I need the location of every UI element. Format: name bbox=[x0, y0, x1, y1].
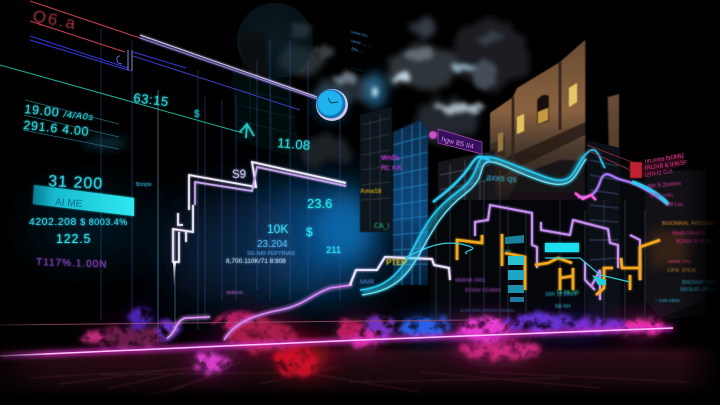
teal right text: ~ 2vM KBMI bbox=[655, 298, 680, 303]
pink sign: hgw 8S II4 bbox=[441, 136, 474, 151]
chart needle bbox=[173, 262, 176, 292]
skyscraper blue wireframe bbox=[393, 120, 428, 285]
teal right text: SBR 12 KKKX bbox=[545, 292, 578, 298]
small caption: Bonpio bbox=[136, 182, 152, 188]
teal right text: 4L NN bbox=[500, 248, 511, 253]
pink right text: IMoRt FRHFFL bbox=[672, 231, 706, 237]
up arrow bbox=[240, 124, 254, 138]
figure 11.08: 11.08 bbox=[277, 135, 311, 153]
left data text bbox=[23, 90, 311, 270]
blue background glow bbox=[30, 137, 385, 305]
pink right text bbox=[648, 181, 715, 274]
table rule lines bbox=[23, 100, 119, 149]
red trend lines bbox=[30, 1, 143, 52]
sky tiny text: www.mv.. bbox=[351, 29, 370, 39]
teal right text: T& RK NS bbox=[556, 290, 580, 296]
teal right text: SOM NRN RRRBN MMMN bbox=[460, 308, 514, 313]
left stepped chart line bbox=[173, 162, 346, 262]
magenta tower label two: RL KK bbox=[381, 165, 402, 172]
figure row: 8,700.110K/71 8:908 bbox=[226, 258, 286, 265]
smoke clouds bbox=[80, 308, 667, 376]
building bbox=[490, 40, 619, 225]
skyscraper dark bbox=[360, 107, 392, 232]
figure row one: 19.00 /4/A0s bbox=[24, 102, 95, 123]
cyan highlighted bar bbox=[33, 185, 134, 216]
magenta tower label: Wnlls bbox=[381, 155, 400, 162]
yellow chart label: PTEP bbox=[386, 258, 408, 267]
orange tower label: Ama18 bbox=[360, 188, 382, 195]
right stepped chart lines bbox=[350, 205, 640, 300]
pink right text: CIFN: 2FBJK bbox=[667, 268, 697, 274]
S9 label: S9 bbox=[232, 169, 246, 181]
teal trend line bbox=[0, 65, 243, 133]
building windows bbox=[498, 83, 577, 152]
pink right text: ft.lts. mKL bbox=[650, 193, 674, 199]
figure 211: 211 bbox=[326, 245, 341, 256]
red label: Q6.a bbox=[31, 6, 79, 33]
magenta blue ribbon bbox=[575, 174, 668, 205]
cyan data blocks bbox=[505, 235, 606, 302]
teal right text: NB RH bbox=[555, 304, 571, 310]
figure 4202: 4202.208 $ 8003.4% bbox=[29, 216, 128, 228]
thin horizon line bbox=[0, 320, 470, 325]
right building gridlines bbox=[436, 170, 645, 320]
red right label panel bbox=[587, 145, 689, 179]
moon bbox=[237, 3, 313, 79]
figure 23.204: 23.204 bbox=[257, 239, 288, 250]
blue tiny labels: MMR bbox=[360, 280, 375, 286]
white violet double line bbox=[140, 35, 317, 99]
bright horizontal light streak bbox=[0, 328, 673, 356]
caption: SMMAN bbox=[226, 290, 243, 295]
red right label panel: IRLIV8 & IHKSF bbox=[644, 160, 689, 172]
teal right text bbox=[455, 248, 716, 313]
dark right buildings bbox=[430, 140, 706, 330]
figure 63.15: 63:15 bbox=[133, 90, 170, 109]
figure 10K: 10K bbox=[267, 222, 288, 236]
pink right text: Ml Lnu bbox=[668, 202, 683, 208]
pink right text: BONMI RLIK RL bbox=[676, 239, 713, 245]
pink right text: Ibh fi 2omnn bbox=[648, 181, 681, 190]
blue trend lines bbox=[30, 36, 300, 110]
storm clouds bbox=[278, 20, 530, 166]
teal right text: MRBNK RRS bbox=[455, 278, 486, 284]
sky tiny text: www...... .. bbox=[351, 38, 372, 48]
figure row two: 291.6 4.00 bbox=[23, 118, 90, 139]
clock icon bbox=[313, 87, 349, 123]
red right label panel: I2RH2 Gol. bbox=[644, 169, 675, 179]
pink sign bbox=[429, 129, 482, 154]
figure 23.6: 23.6 bbox=[307, 196, 332, 211]
background tower under moon bbox=[232, 70, 300, 160]
figure 31 200: 31 200 bbox=[48, 173, 104, 193]
sky tiny text: ... ...... bbox=[351, 64, 364, 72]
green tower label: CA_I bbox=[374, 223, 390, 230]
sky tiny text bbox=[351, 29, 372, 72]
purple figure: T117%.1.00N bbox=[36, 257, 108, 270]
pink right text: MRIM: ITAL bbox=[668, 259, 692, 264]
blue data panel lines bbox=[405, 243, 630, 282]
cyan ribbon bbox=[360, 150, 605, 295]
faint vertical gridlines bbox=[101, 28, 340, 345]
mid low buildings bbox=[438, 150, 495, 270]
center blue data text bbox=[226, 169, 341, 295]
orange chart lines bbox=[457, 234, 660, 295]
teal right text: ROMM FEMMN bbox=[465, 288, 501, 294]
dollar sign: $ bbox=[194, 109, 200, 120]
ground bbox=[0, 340, 720, 405]
sky tiny text: Mix.... bbox=[351, 46, 364, 54]
small caption row: SG NIR FEPTRIAN bbox=[247, 251, 295, 257]
smoke glow bbox=[83, 312, 666, 373]
teal right text: BNONMP 7AM bbox=[682, 280, 716, 286]
figure 122.5: 122.5 bbox=[56, 232, 91, 246]
cyan building label: axxs qs bbox=[486, 172, 517, 184]
dollar sign: $ bbox=[306, 225, 313, 239]
orange caption: BSIONNAL RIISSING bbox=[662, 221, 715, 227]
magenta flow lines bbox=[167, 285, 352, 340]
cyan highlighted bar: AI ME bbox=[55, 197, 83, 210]
blue tower labels bbox=[360, 155, 517, 286]
teal right text: SMJ&4R ZNS II bbox=[680, 287, 715, 293]
red right label panel: nn.nms fs/JHU bbox=[644, 154, 684, 165]
